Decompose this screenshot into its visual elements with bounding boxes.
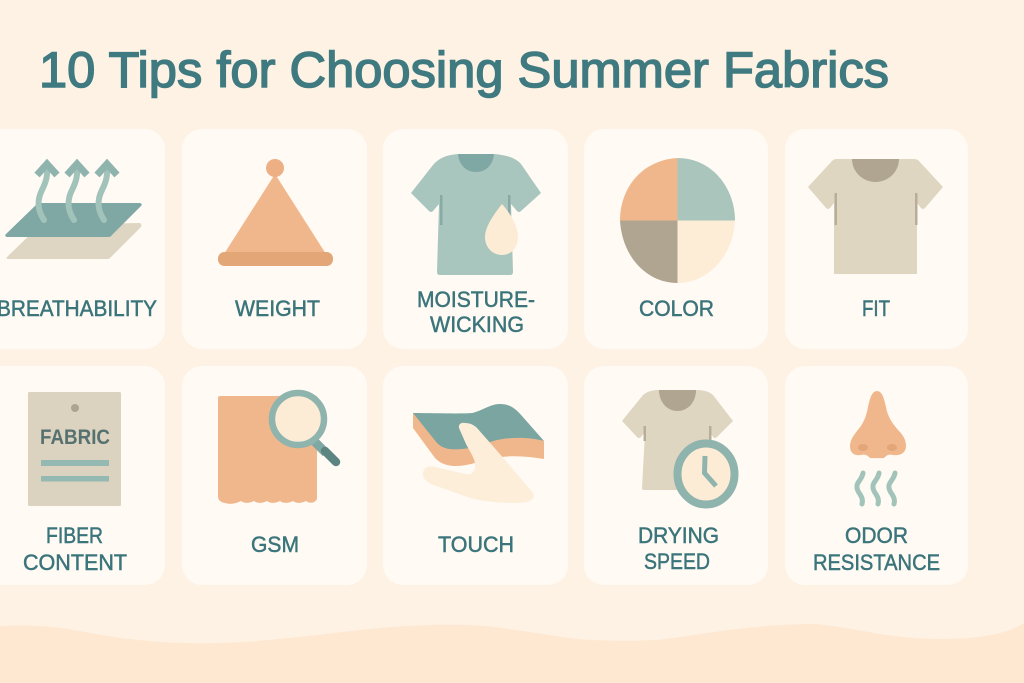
- icon: weight hat shape: [218, 159, 333, 266]
- label: WEIGHT: [235, 296, 320, 321]
- label: [417, 287, 535, 337]
- icon: swatch with magnifier: [218, 393, 336, 504]
- icon: t-shirt with water drop: [411, 154, 541, 275]
- label: BREATHABILITY: [0, 296, 157, 321]
- label: [638, 523, 719, 574]
- label: [23, 523, 127, 575]
- card: breathability: [0, 129, 165, 349]
- icon: colour wheel: [620, 158, 735, 283]
- label: MOISTURE-: [417, 287, 535, 312]
- icon: beige t-shirt: [808, 159, 943, 274]
- card: touch: [383, 366, 568, 585]
- label: ODOR: [845, 523, 908, 548]
- card: gsm: [182, 366, 367, 585]
- label: FIBER: [46, 523, 103, 548]
- label: SPEED: [644, 549, 710, 574]
- bottom wave: [0, 623, 1024, 683]
- icon: fabric layers with rising air arrows: [5, 164, 142, 259]
- icon: fabric tag: FABRIC: [40, 426, 110, 449]
- label: COLOR: [639, 296, 714, 321]
- label: FIT: [862, 296, 890, 321]
- label: WICKING: [430, 312, 524, 337]
- card: odor resistance: [785, 366, 968, 585]
- label: [813, 523, 940, 575]
- icon: t-shirt with clock: [622, 390, 734, 504]
- card: fit: [785, 129, 968, 349]
- icon: hand touching fabric: [413, 404, 544, 503]
- icon: nose with odor waves: [850, 391, 906, 504]
- label: CONTENT: [23, 550, 127, 575]
- title: 10 Tips for Choosing Summer Fabrics: [39, 41, 889, 98]
- card: weight: [182, 129, 367, 349]
- card: moisture-wicking: [383, 129, 568, 349]
- card: color: [584, 129, 768, 349]
- label: DRYING: [638, 523, 719, 548]
- label: GSM: [251, 532, 299, 557]
- label: RESISTANCE: [813, 550, 940, 575]
- card: drying speed: [584, 366, 768, 585]
- label: TOUCH: [438, 532, 514, 557]
- card: fiber content: [0, 366, 165, 585]
- icon: fabric tag: [28, 392, 121, 506]
